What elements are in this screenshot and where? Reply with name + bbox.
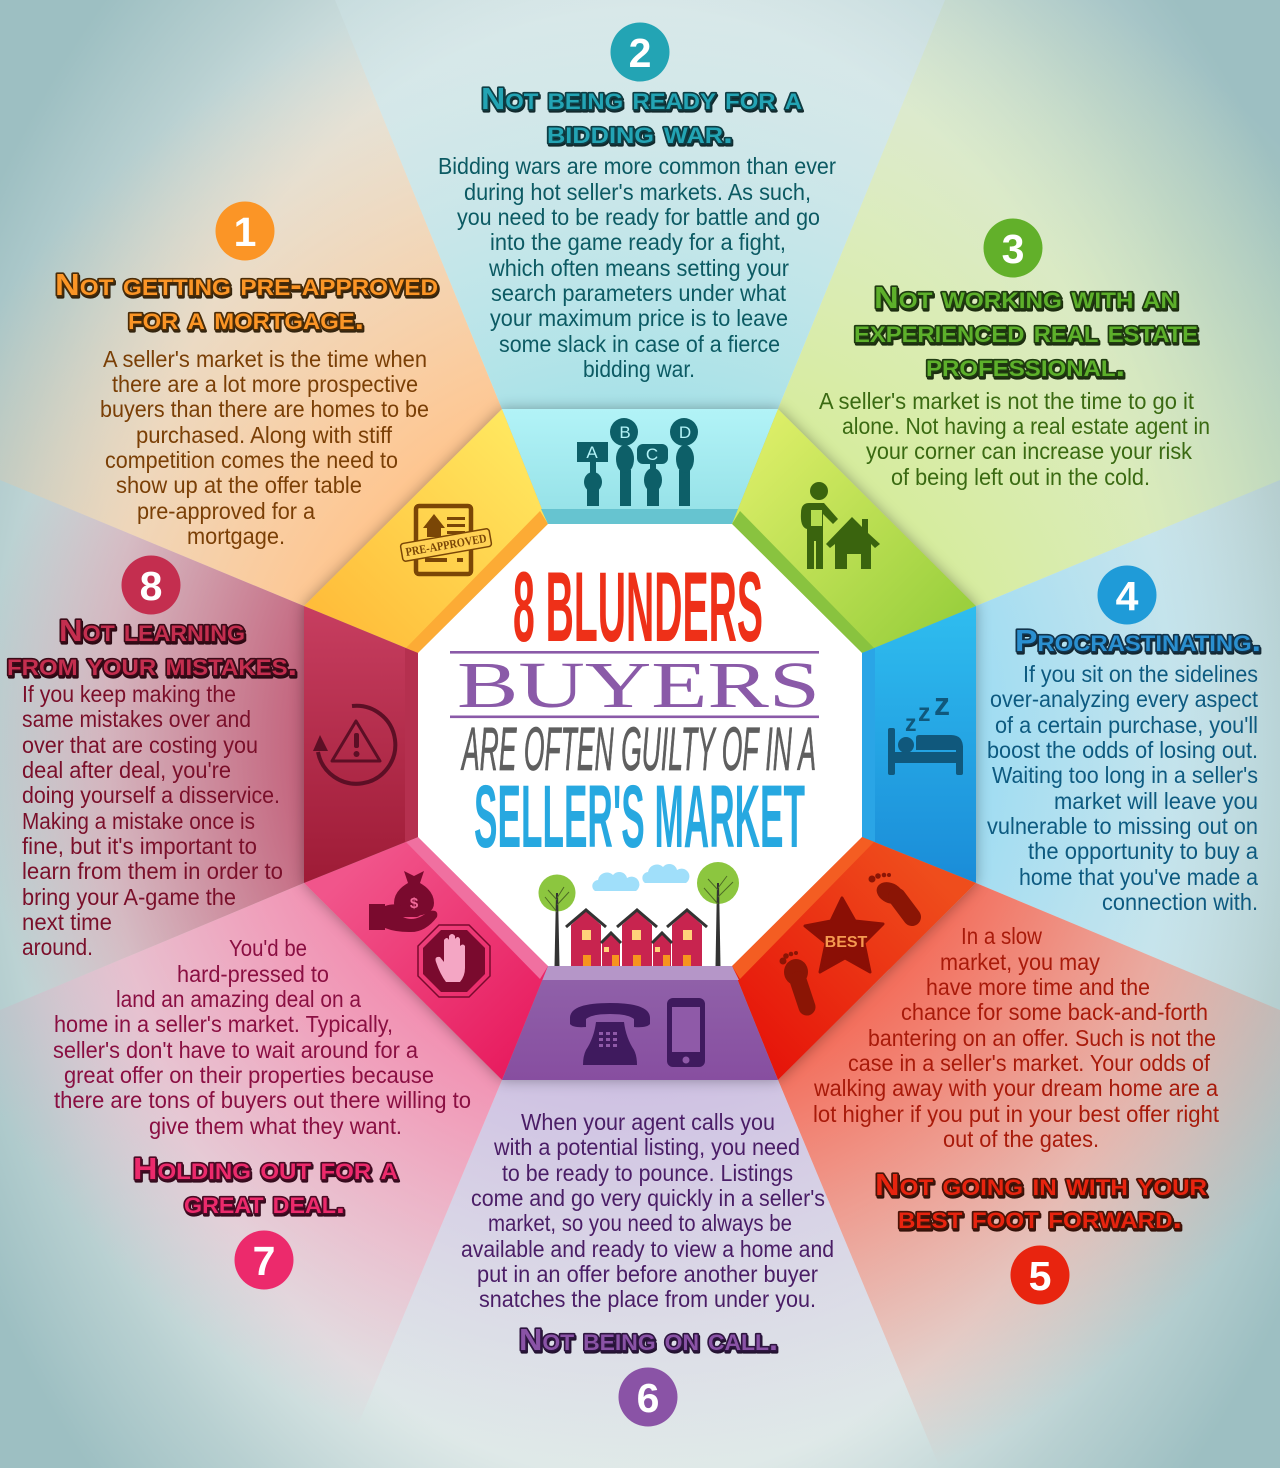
ring segment 2 <box>502 409 778 524</box>
body text 5: market, you may <box>940 949 1100 975</box>
section 5 <box>813 923 1220 1304</box>
body text 7: give them what they want. <box>149 1113 402 1139</box>
body text 2: into the game ready for a fight, <box>490 229 786 255</box>
body text 1: buyers than there are homes to be <box>100 396 429 422</box>
heading 4: Procrastinating. <box>1015 623 1261 658</box>
body text 5: bantering on an offer. Such is not the <box>868 1025 1216 1051</box>
body text 8: around. <box>22 934 93 960</box>
body text 3 <box>819 388 1210 490</box>
section 1 <box>55 202 438 549</box>
body text 1: there are a lot more prospective <box>112 371 418 397</box>
body text 8: same mistakes over and <box>22 706 251 732</box>
body text 1: A seller's market is the time when <box>103 346 427 372</box>
heading 5 <box>875 1167 1207 1235</box>
icon: pre-approved document: PRE-APPROVED <box>404 531 488 559</box>
text: ARE OFTEN GUILTY OF IN A <box>460 715 816 783</box>
number badge 7: 7 <box>253 1238 275 1284</box>
body text 2: Bidding wars are more common than ever <box>438 153 836 179</box>
number badge 2: 2 <box>629 30 651 76</box>
body text 7: seller's don't have to wait around for a <box>53 1037 418 1063</box>
body text 1: show up at the offer table <box>116 472 362 498</box>
body text 6: put in an offer before another buyer <box>477 1261 818 1287</box>
heading 1: for a mortgage. <box>128 301 364 336</box>
number badge 1: 1 <box>234 209 256 255</box>
body text 7: You'd be <box>229 935 307 961</box>
section 3 <box>819 218 1210 490</box>
body text 4: home that you've made a <box>1019 864 1258 890</box>
heading 3: professional. <box>926 348 1125 383</box>
body text 6: with a potential listing, you need <box>493 1134 800 1160</box>
heading 3: experienced real estate <box>854 314 1198 349</box>
icon: money bag in hand and stop sign: $ <box>410 895 419 912</box>
body text 4: connection with. <box>1102 889 1258 915</box>
number badge 5: 5 <box>1029 1253 1051 1299</box>
icon: telephone and mobile <box>570 998 705 1067</box>
number badge 7 <box>234 1230 294 1290</box>
body text 7: great offer on their properties because <box>64 1062 434 1088</box>
body text 6: come and go very quickly in a seller's <box>471 1185 825 1211</box>
ring segment 1 <box>304 409 548 653</box>
body text 8: over that are costing you <box>22 732 258 758</box>
icon: money bag in hand and stop sign <box>369 871 490 997</box>
left tree <box>538 874 576 966</box>
body text 4: of a certain purchase, you'll <box>995 712 1258 738</box>
body text 2: your maximum price is to leave <box>490 305 788 331</box>
number badge 6: 6 <box>637 1375 659 1421</box>
houses <box>566 910 707 966</box>
body text 2: some slack in case of a fierce <box>499 331 780 357</box>
text: 8 BLUNDERS <box>513 551 763 662</box>
section 7 <box>53 935 471 1290</box>
icon: warning triangle with circular arrow <box>313 706 395 784</box>
heading 2: Not being ready for a <box>481 81 802 116</box>
body text 4: market will leave you <box>1054 788 1258 814</box>
body text 2: which often means setting your <box>488 255 789 281</box>
number badge 5 <box>1010 1246 1070 1304</box>
icon: pre-approved document <box>400 506 492 574</box>
body text 8: If you keep making the <box>22 681 236 707</box>
number badge 3 <box>984 218 1042 278</box>
title line: buyers: BUYERS <box>457 649 820 722</box>
heading 3 <box>854 280 1198 383</box>
icon: bed with sleeping zzz: z <box>905 710 916 736</box>
body text 5: have more time and the <box>926 974 1150 1000</box>
body text 8: bring your A-game the <box>22 884 236 910</box>
body text 3: of being left out in the cold. <box>891 464 1150 490</box>
body text 2: bidding war. <box>583 356 695 382</box>
section 2 <box>438 22 836 382</box>
ring segment 4 <box>862 606 976 883</box>
white centre octagon <box>418 524 862 966</box>
heading 6: Not being on call. <box>519 1322 778 1357</box>
body text 8: deal after deal, you're <box>22 757 231 783</box>
icon: hands holding up bid signs: D <box>679 423 691 442</box>
number badge 3: 3 <box>1002 226 1024 272</box>
number badge 1 <box>216 202 274 260</box>
body text 1 <box>100 346 429 549</box>
section 6 <box>461 1109 834 1426</box>
heading 7 <box>133 1151 398 1220</box>
body text 8: doing yourself a disservice. <box>22 782 280 808</box>
body text 8: Making a mistake once is <box>22 808 255 834</box>
heading 1 <box>55 267 438 336</box>
body text 5: lot higher if you put in your best offer right <box>813 1101 1220 1127</box>
ring segment 5 <box>732 837 976 1080</box>
heading 1: Not getting pre-approved <box>55 267 438 302</box>
heading 7: great deal. <box>184 1185 345 1220</box>
icon: star with footprints <box>780 873 912 1007</box>
body text 8: fine, but it's important to <box>22 833 257 859</box>
right tree <box>697 862 739 966</box>
body text 8: next time <box>22 909 112 935</box>
body text 2: during hot seller's markets. As such, <box>464 179 811 205</box>
icon: bed with sleeping zzz <box>888 686 963 775</box>
body text 6: snatches the place from under you. <box>479 1286 816 1312</box>
body text 1: pre-approved for a <box>137 498 315 524</box>
body text 2: you need to be ready for battle and go <box>457 204 820 230</box>
heading 2 <box>481 81 802 150</box>
number badge 8: 8 <box>140 563 162 609</box>
body text 5: In a slow <box>961 923 1042 949</box>
main title <box>450 551 820 866</box>
section 8 <box>7 556 297 960</box>
body text 5: case in a seller's market. Your odds of <box>848 1050 1211 1076</box>
ring segment 3 <box>732 409 976 653</box>
heading 2: bidding war. <box>547 115 733 150</box>
body text 4: Waiting too long in a seller's <box>992 762 1258 788</box>
number badge 4 <box>1098 566 1156 624</box>
number badge 2 <box>610 22 670 82</box>
body text 3: A seller's market is not the time to go it <box>819 388 1195 414</box>
number badge 4: 4 <box>1116 573 1139 619</box>
body text 4: boost the odds of losing out. <box>987 737 1258 763</box>
ring segment 8 <box>304 606 418 883</box>
body text 6: to be ready to pounce. Listings <box>502 1160 793 1186</box>
body text 8 <box>22 681 283 960</box>
body text 7: there are tons of buyers out there willing to <box>54 1087 471 1113</box>
heading 8: Not learning <box>59 613 245 648</box>
body text 7: home in a seller's market. Typically, <box>54 1011 393 1037</box>
body text 3: your corner can increase your risk <box>866 438 1192 464</box>
body text 6 <box>461 1109 834 1312</box>
cloud left <box>592 872 639 891</box>
icon: bed with sleeping zzz: z <box>934 686 950 722</box>
body text 4: vulnerable to missing out on <box>987 813 1258 839</box>
heading 5: best foot forward. <box>898 1200 1182 1235</box>
number badge 6 <box>618 1368 678 1426</box>
body text 7 <box>53 935 471 1139</box>
body text 5: walking away with your dream home are a <box>813 1075 1218 1101</box>
body text 5: out of the gates. <box>943 1126 1099 1152</box>
body text 1: purchased. Along with stiff <box>136 422 393 448</box>
body text 7: hard-pressed to <box>177 961 329 987</box>
icon: hands holding up bid signs: C <box>646 445 658 464</box>
cloud right <box>642 864 689 883</box>
body text 4 <box>987 661 1259 915</box>
octagon ring <box>304 409 976 1080</box>
heading 8: from your mistakes. <box>7 647 297 682</box>
heading 5: Not going in with your <box>875 1167 1207 1202</box>
body text 3: alone. Not having a real estate agent in <box>842 413 1210 439</box>
body text 5 <box>813 923 1220 1152</box>
illustration: neighbourhood with houses, trees and clouds <box>538 862 739 966</box>
number badge 8 <box>122 556 180 614</box>
body text 1: mortgage. <box>187 523 285 549</box>
ring segment 6 <box>502 966 778 1080</box>
icon: hands holding up bid signs: A <box>586 443 598 462</box>
icon: hands holding up bid signs: B <box>619 423 631 442</box>
icon: agent with house <box>801 482 880 569</box>
body text 1: competition comes the need to <box>105 447 398 473</box>
body text 2 <box>438 153 836 382</box>
ring segment 7 <box>304 837 548 1080</box>
body text 5: chance for some back-and-forth <box>901 999 1208 1025</box>
icon: hands holding up bid signs <box>577 418 698 506</box>
section 4 <box>987 566 1261 915</box>
body text 6: available and ready to view a home and <box>461 1236 834 1262</box>
icon: bed with sleeping zzz: z <box>918 699 930 727</box>
body text 4: If you sit on the sidelines <box>1023 661 1258 687</box>
body text 2: search parameters under what <box>491 280 787 306</box>
body text 8: learn from them in order to <box>22 858 283 884</box>
body text 4: over-analyzing every aspect <box>990 686 1259 712</box>
body text 6: When your agent calls you <box>521 1109 775 1135</box>
body text 6: market, so you need to always be <box>488 1210 792 1236</box>
body text 4: the opportunity to buy a <box>1028 838 1258 864</box>
heading 8 <box>7 613 297 682</box>
icon: star with footprints: BEST <box>825 934 868 951</box>
body text 7: land an amazing deal on a <box>116 986 361 1012</box>
heading 3: Not working with an <box>874 280 1178 315</box>
heading 7: Holding out for a <box>133 1151 398 1186</box>
